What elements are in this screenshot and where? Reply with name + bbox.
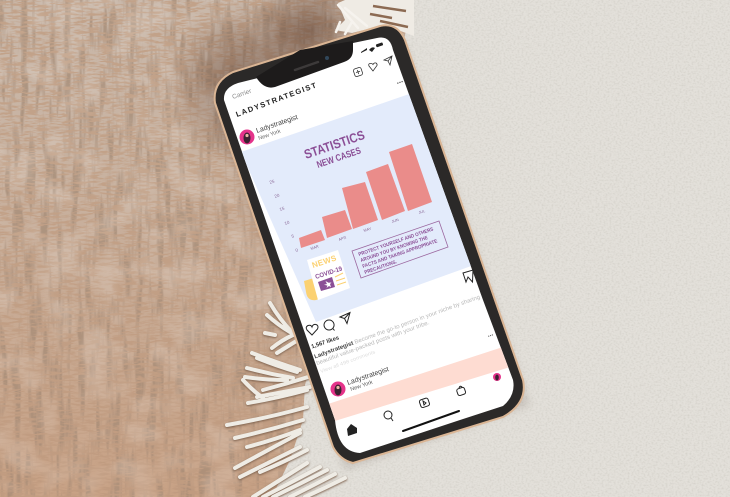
y axis labels: 20 [274,192,281,199]
location: New York [258,129,282,142]
x axis labels: JUN [391,218,400,224]
new cases subheading: NEW CASES [315,145,362,171]
bottom fringe [227,303,345,497]
speaker [295,62,318,70]
covid label: COVID-19 [314,265,344,281]
advice callout: PRECAUTIONS. [364,259,398,276]
caption: View all 498 comments [320,349,377,375]
y axis labels: 15 [279,205,286,212]
icon: like [306,324,318,335]
caption: beautiful value-packed posts with your tribe. [316,320,431,367]
icon: shop [456,386,466,396]
post panel [241,93,474,322]
linen cloth [270,0,730,497]
peach story band [329,348,508,421]
avatar [330,382,346,396]
camera [325,56,329,60]
x axis labels: MAY [363,227,372,233]
status bar [361,42,383,53]
bar chart [269,144,432,253]
x axis labels: APR [338,236,347,242]
y axis labels: 25 [269,178,276,185]
like count: 1,567 likes [311,335,340,350]
advice callout: FACTS AND TAKING APPROPRIATE [362,238,439,270]
advice callout: PROTECT YOURSELF AND OTHERS [358,226,435,258]
top fringe [335,0,414,36]
post header [240,114,299,144]
news label: NEWS [311,253,338,270]
more dots: ... [486,330,494,339]
phone shadow [215,45,530,470]
account name: Ladystrategist [255,114,299,135]
y axis labels: 10 [284,219,291,226]
icon: newspaper [304,250,350,300]
caption: Ladystrategist Become the go-to person in your niche by sharing [314,295,481,360]
icon: comment [324,320,334,330]
y axis labels: 5 [291,233,295,239]
y axis labels [269,178,299,253]
bottom navigation [347,386,466,436]
top action icons [353,56,392,77]
advice callout [352,221,448,278]
account name: Ladystrategist [346,366,390,387]
bars [299,144,432,248]
x axis labels [310,209,426,251]
location: New York [350,380,374,393]
statistics heading: STATISTICS [302,127,367,162]
x axis labels: JUL [418,209,426,215]
icon: reels [419,398,430,408]
avatar [240,130,254,144]
small avatar [493,373,501,381]
icon: bookmark [463,270,473,282]
carrier label: Carrier [231,88,253,101]
account heading: LADYSTRATEGIST [235,81,318,119]
notch [256,41,353,88]
x axis labels: MAR [310,244,320,251]
icon: home [347,424,357,436]
chart title [302,127,367,171]
second profile [330,366,390,396]
icon: share [340,312,350,324]
screen [224,38,514,453]
phone body [215,25,524,463]
top menu dots: ... [395,75,404,86]
y axis labels: 0 [295,247,299,253]
post actions [306,312,350,335]
home indicator [403,411,459,431]
wood background [0,0,430,497]
advice callout: AROUND YOU BY KNOWING THE [360,235,429,264]
icon: search [384,411,393,421]
